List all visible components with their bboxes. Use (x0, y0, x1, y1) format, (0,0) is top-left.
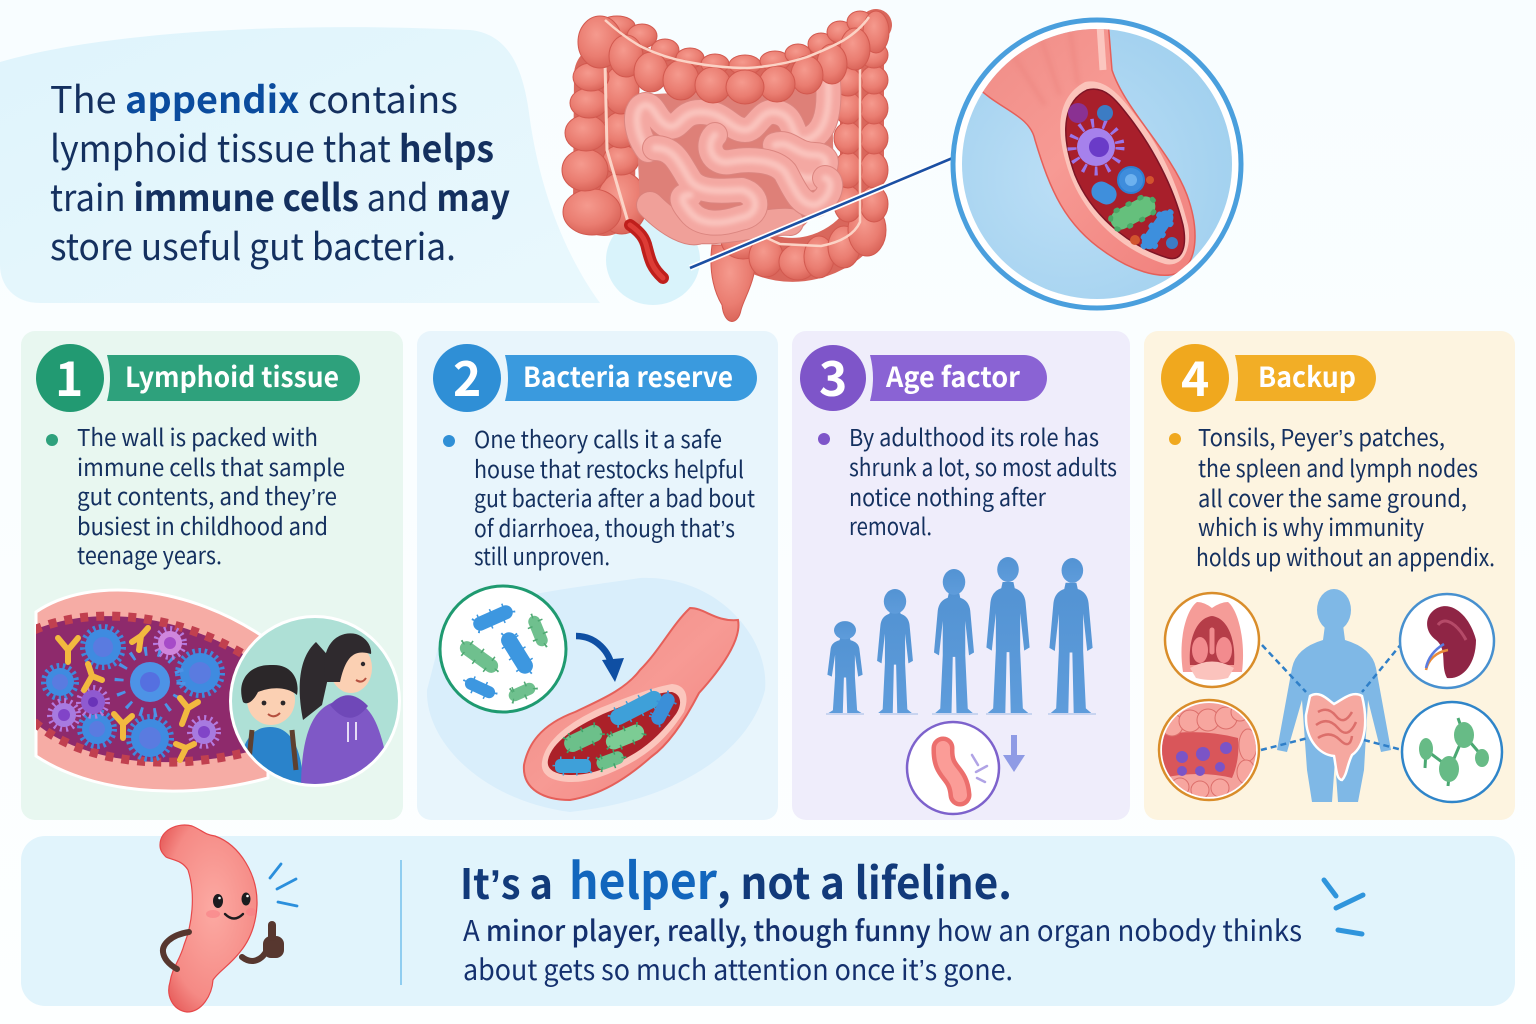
arrow into appendix (576, 636, 624, 682)
hero text (50, 70, 510, 271)
connector lines (1261, 643, 1406, 751)
panel: lymphoid tissue (21, 331, 403, 820)
panel: bacteria reserve (417, 331, 778, 820)
small intestine (635, 82, 834, 236)
body text 1: gut contents, and they’re (77, 478, 337, 512)
body text 2: house that restocks helpful (474, 451, 744, 485)
icon: lymph nodes (1402, 702, 1502, 802)
appendix worm (630, 225, 663, 278)
decorative accent ticks (1324, 880, 1363, 934)
bacteria in appendix (1088, 167, 1178, 252)
body text 4: Tonsils, Peyer’s patches, (1198, 419, 1445, 453)
badge 3: Age factor (885, 356, 1021, 396)
antibodies (58, 628, 198, 760)
badge 3 (800, 340, 1047, 411)
pale backdrop (427, 578, 765, 812)
illustration: digestive tract with appendix (562, 11, 889, 321)
body text 1: immune cells that sample (77, 449, 345, 483)
pointer line to magnified view (690, 157, 955, 268)
badge 4: 4 (1181, 340, 1209, 410)
icon: spleen (1400, 594, 1494, 688)
body text 4 (1169, 419, 1495, 573)
mascot face (206, 892, 256, 918)
body text 4: holds up without an appendix. (1196, 539, 1495, 573)
footer text: about gets so much attention once it’s gone. (463, 948, 1013, 989)
body text 3: notice nothing after (849, 479, 1047, 513)
hero text: The appendix contains (50, 70, 458, 124)
immune cell purple (1068, 103, 1120, 171)
badge 3: 3 (819, 340, 847, 410)
rectum and sigmoid (711, 50, 886, 321)
ascending colon (562, 62, 647, 235)
badge 2 (433, 340, 757, 412)
body text 4: the spleen and lymph nodes (1198, 450, 1478, 484)
body text 1: busiest in childhood and (77, 508, 328, 542)
body text 3: removal. (849, 508, 932, 542)
badge 2: Bacteria reserve (523, 356, 733, 396)
mascot: smiling appendix (160, 825, 297, 1012)
body text 3: By adulthood its role has (849, 419, 1099, 453)
body text 1: teenage years. (77, 537, 222, 571)
purple immune cells (50, 629, 218, 746)
intestine in body (1306, 694, 1365, 780)
blue immune cells (44, 627, 222, 759)
appendix with bacteria (524, 608, 738, 800)
badge 4: Backup (1258, 356, 1356, 396)
body text 2: One theory calls it a safe (474, 421, 722, 455)
badge 4 (1161, 340, 1376, 412)
panel: hero statement (0, 27, 600, 303)
icon: tonsils (1165, 593, 1259, 687)
descending colon (743, 42, 888, 246)
body text 1 (46, 419, 345, 571)
arrow: decline (1003, 735, 1025, 772)
body text 2: gut bacteria after a bad bout (474, 480, 755, 514)
body text 3 (818, 419, 1117, 542)
magnified appendix view (950, 20, 1241, 308)
girl (300, 633, 384, 784)
footer text: A minor player, really, though funny how an organ nobody thinks (463, 909, 1302, 950)
hero text: train immune cells and may (50, 168, 510, 222)
hero text: store useful gut bacteria. (50, 217, 456, 271)
body text 2: still unproven. (474, 538, 610, 572)
illustration: lymphoid wall section (34, 590, 268, 791)
shrinking appendix icon (907, 722, 999, 814)
body text 4: which is why immunity (1198, 509, 1424, 543)
footer banner (21, 836, 1515, 1006)
body text 3: shrunk a lot, so most adults (849, 449, 1117, 483)
panel: backup (1144, 331, 1515, 820)
footer headline: It’s a (460, 851, 553, 912)
body text 2: of diarrhoea, though that’s (474, 510, 735, 544)
bacteria sample circle (440, 586, 566, 712)
body text 2 (443, 421, 755, 572)
boy (241, 665, 304, 784)
body silhouette (1277, 589, 1391, 802)
illustration: children portrait (229, 615, 401, 790)
mascot thumbs-up hand (263, 921, 284, 958)
badge 1: 1 (55, 340, 83, 410)
icon: Peyer's patches (1159, 700, 1260, 800)
body text 1: The wall is packed with (77, 419, 318, 453)
footer text (463, 909, 1302, 989)
body text 4: all cover the same ground, (1198, 480, 1467, 514)
badge 1 (36, 340, 360, 412)
footer headline (460, 842, 1012, 914)
hero text: lymphoid tissue that helps (50, 119, 494, 173)
mascot sparkle ticks (270, 864, 297, 906)
footer headline: , not a lifeline. (717, 848, 1012, 912)
footer headline: helper (569, 842, 717, 914)
age progression silhouettes (826, 557, 1096, 714)
panel: age factor (792, 331, 1130, 820)
badge 1: Lymphoid tissue (125, 356, 339, 396)
badge 2: 2 (453, 340, 481, 410)
mascot arms (163, 932, 267, 969)
transverse colon (578, 11, 889, 104)
